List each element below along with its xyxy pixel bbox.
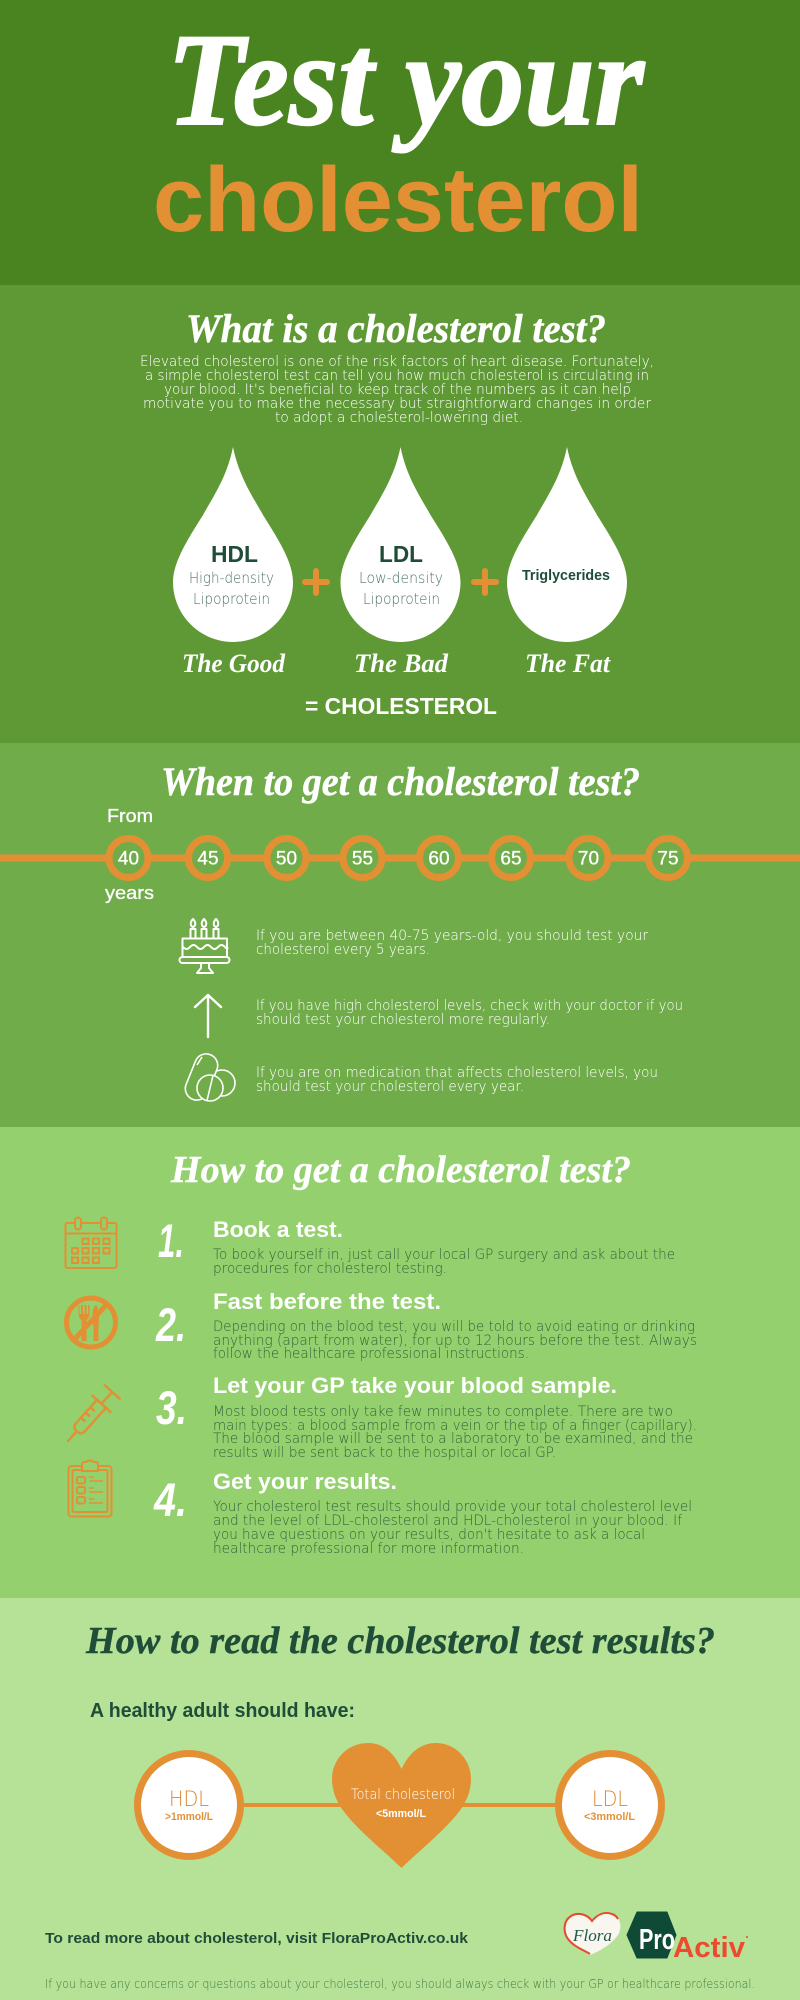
timeline: ages 40 to 75: 65: [500, 848, 522, 870]
step 1: book a test: Book a test.: [213, 1217, 343, 1242]
number: 4: 4.: [153, 1473, 187, 1526]
logo: ProActiv: Pro: [639, 1924, 675, 1956]
title: cholesterol: cholesterol: [153, 149, 643, 251]
text block: high cholesterol advice: should test your cholesterol more regularly.: [256, 1012, 550, 1028]
text block: introduction: to adopt a cholesterol-lowering diet.: [275, 410, 523, 426]
step 2: fast before the test: follow the healthcare professional instructions.: [213, 1346, 529, 1362]
panel: what is a cholesterol test: [0, 285, 800, 743]
heading: what is a cholesterol test: What is a cholesterol test?: [186, 306, 606, 351]
heading: how to read the results: How to read the cholesterol test results?: [85, 1620, 715, 1662]
heart: total cholesterol: [332, 1743, 471, 1868]
ring: HDL: >1mmol/L: [165, 1811, 213, 1823]
step 3: let your GP take your blood sample: [213, 1373, 697, 1461]
step 2: fast before the test: Depending on the blood test, you will be told to avoid eating or drinking: [213, 1319, 695, 1335]
title: Test your: Test your: [167, 6, 646, 153]
drop: HDL: [173, 447, 293, 642]
number: 2: 2.: [155, 1298, 186, 1351]
drop: HDL: High-density: [189, 569, 274, 587]
step 3: let your GP take your blood sample: results will be sent back to the hospital or local GP.: [213, 1445, 556, 1461]
text block: introduction: your blood. It's beneficial to keep track of the numbers as it can help: [164, 382, 631, 398]
number: 1: 1.: [158, 1214, 184, 1267]
icon: calendar: [66, 1218, 116, 1268]
step 3: let your GP take your blood sample: The blood sample will be sent to a laboratory to be examined, and the: [213, 1431, 693, 1447]
timeline: ages 40 to 75: 75: [657, 848, 679, 870]
label: the bad: The Bad: [354, 649, 449, 678]
text block: high cholesterol advice: If you have high cholesterol levels, check with your doctor if you: [256, 998, 683, 1014]
timeline: ages 40 to 75: 55: [352, 848, 373, 870]
panel: when to get a cholesterol test: [0, 743, 800, 1127]
step 4: get your results: you have questions on your results, don't hesitate to ask a local: [213, 1527, 645, 1543]
label: years: years: [105, 883, 154, 903]
drop: HDL: HDL: [211, 541, 258, 567]
logo: Flora: [565, 1913, 620, 1955]
logo: Flora: Flora: [572, 1926, 612, 1945]
ring: LDL: <3mmol/L: [584, 1811, 635, 1823]
icon: up arrow: [195, 995, 221, 1037]
heading: how to get a test: How to get a cholesterol test?: [170, 1149, 631, 1191]
text block: age advice: cholesterol every 5 years.: [256, 942, 430, 958]
drop: LDL: Low-density: [359, 569, 443, 587]
text block: high cholesterol advice: [256, 998, 683, 1028]
timeline: ages 40 to 75: 50: [276, 848, 297, 870]
step 4: get your results: Get your results.: [213, 1469, 397, 1494]
icon: syringe: [59, 1384, 121, 1449]
timeline: ages 40 to 75: [0, 838, 800, 878]
ring: HDL: [138, 1754, 240, 1856]
drop: triglycerides: [507, 447, 627, 642]
timeline: ages 40 to 75: 45: [197, 848, 219, 870]
link text: read more: To read more about cholesterol, visit FloraProActiv.co.uk: [45, 1930, 469, 1947]
text block: medication advice: [256, 1065, 658, 1095]
text block: introduction: Elevated cholesterol is one of the risk factors of heart disease. Fortunately,: [140, 354, 654, 370]
step 4: get your results: healthcare professional for more information.: [213, 1541, 524, 1557]
step 4: get your results: Your cholesterol test results should provide your total cholesterol level: [213, 1499, 692, 1515]
heading: when to get a test: When to get a cholesterol test?: [161, 759, 640, 804]
text block: introduction: a simple cholesterol test can tell you how much cholesterol is circulating in: [145, 368, 649, 384]
icon: no eating: [66, 1298, 116, 1347]
number: 3: 3.: [156, 1381, 187, 1434]
text block: age advice: [256, 928, 648, 958]
label: from: From: [107, 806, 153, 826]
drop: LDL: [340, 447, 460, 642]
step 3: let your GP take your blood sample: main types: a blood sample from a vein or the tip of a finger (capillary).: [213, 1418, 697, 1434]
ring: LDL: [558, 1754, 662, 1856]
text block: age advice: If you are between 40-75 years-old, you should test your: [256, 928, 648, 944]
step 4: get your results: [213, 1469, 692, 1557]
drop: LDL: Lipoprotein: [363, 590, 440, 608]
panel: title header: [0, 0, 800, 285]
ring: LDL: LDL: [592, 1787, 628, 1811]
drop: HDL: Lipoprotein: [193, 590, 270, 608]
step 1: book a test: To book yourself in, just call your local GP surgery and ask about the: [213, 1247, 675, 1263]
step 2: fast before the test: Fast before the test.: [213, 1289, 441, 1314]
step 1: book a test: procedures for cholesterol testing.: [213, 1261, 447, 1277]
icon: plus: [305, 571, 327, 593]
connector line: [243, 1803, 555, 1807]
label: the fat: The Fat: [525, 649, 611, 678]
text block: introduction: [140, 354, 654, 426]
drop: triglycerides: Triglycerides: [522, 567, 610, 584]
icon: birthday cake: [180, 919, 230, 973]
panel: how to get a cholesterol test: [0, 1127, 800, 1598]
text block: introduction: motivate you to make the necessary but straightforward changes in order: [143, 396, 651, 412]
step 3: let your GP take your blood sample: Most blood tests only take few minutes to complete. There are two: [213, 1404, 673, 1420]
logo: ProActiv: Activ: [673, 1932, 745, 1964]
ring: HDL: HDL: [169, 1787, 209, 1811]
logo: ProActiv: [627, 1912, 748, 1964]
step 1: book a test: [213, 1217, 675, 1277]
panel: how to read the results: [0, 1598, 800, 2000]
icon: clipboard: [68, 1460, 112, 1516]
timeline: ages 40 to 75: 70: [578, 848, 599, 870]
timeline: ages 40 to 75: 40: [118, 848, 139, 870]
step 4: get your results: and the level of LDL-cholesterol and HDL-cholesterol in your blood. If: [213, 1513, 682, 1529]
text block: medication advice: should test your cholesterol every year.: [256, 1079, 524, 1095]
icon: plus: [474, 571, 496, 593]
subheading: a healthy adult should have: A healthy adult should have:: [90, 1700, 355, 1722]
text block: medication advice: If you are on medication that affects cholesterol levels, you: [256, 1065, 658, 1081]
heart: total cholesterol: <5mmol/L: [376, 1808, 426, 1820]
step 2: fast before the test: [213, 1289, 697, 1362]
heart: total cholesterol: Total cholesterol: [351, 1787, 455, 1803]
equation: equals cholesterol: = CHOLESTEROL: [305, 693, 497, 719]
icon: pills: [182, 1050, 235, 1104]
drop: LDL: LDL: [379, 541, 423, 567]
step 2: fast before the test: anything (apart from water), for up to 12 hours before the test. Always: [213, 1333, 697, 1349]
label: the good: The Good: [182, 649, 286, 678]
step 3: let your GP take your blood sample: Let your GP take your blood sample.: [213, 1373, 617, 1398]
timeline: ages 40 to 75: 60: [428, 848, 450, 870]
